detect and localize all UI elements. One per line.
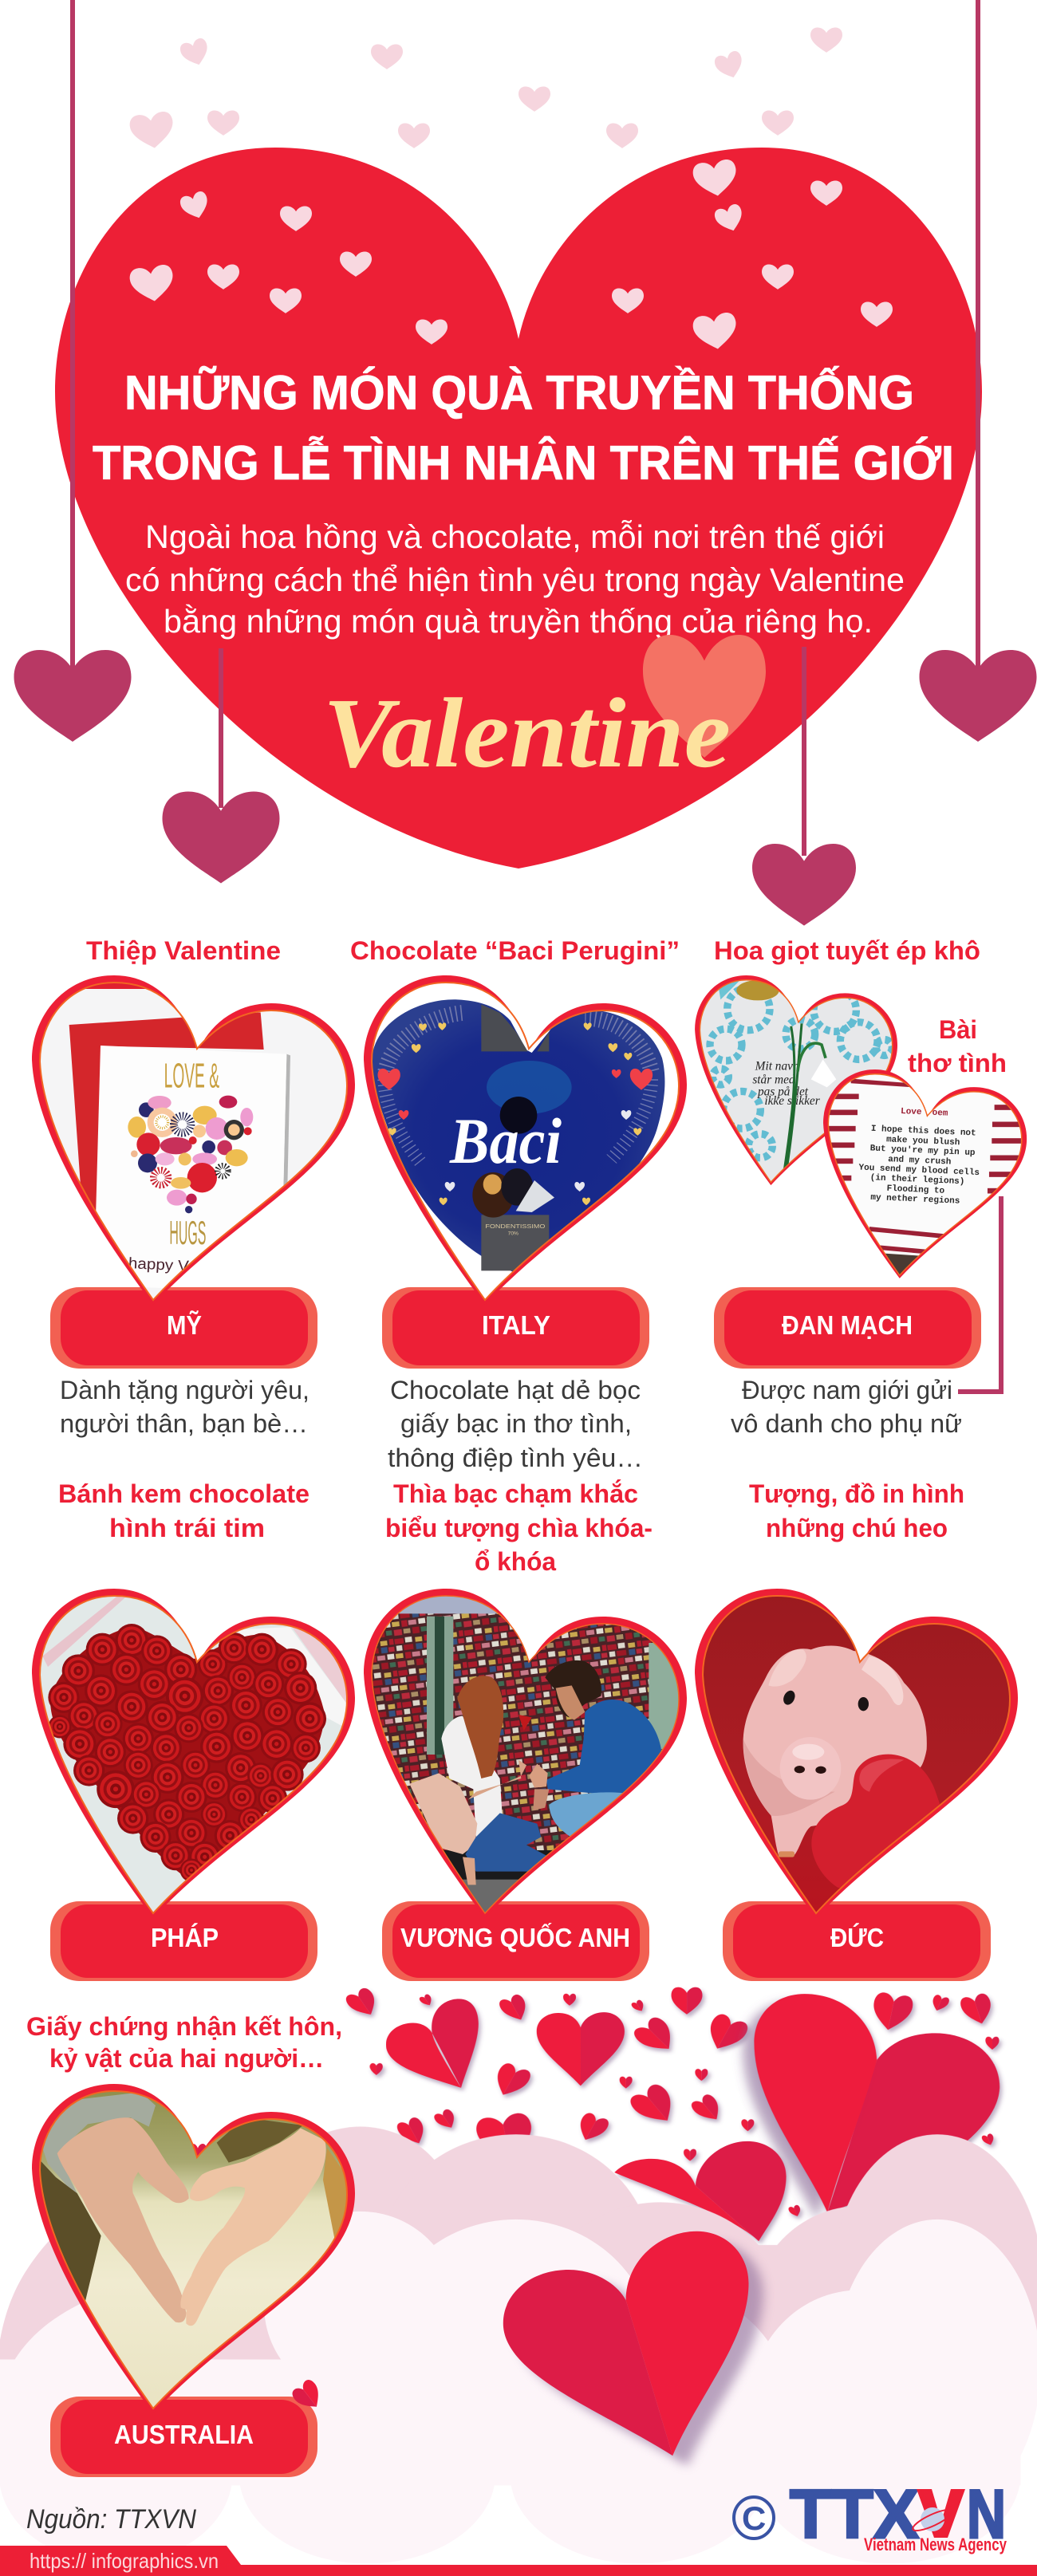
source: Nguồn: TTXVN — [26, 2504, 196, 2535]
row 2 country buttons — [50, 1901, 991, 1981]
row 1 descriptions: Chocolate hạt dẻ bọc — [390, 1376, 641, 1404]
row 2 button text: VƯƠNG QUỐC ANH — [400, 1922, 630, 1952]
row 1 labels: Hoa giọt tuyết ép khô — [714, 936, 980, 965]
label: marriage certificate: kỷ vật của hai người… — [49, 2044, 324, 2073]
row 1 labels: Thiệp Valentine — [86, 936, 281, 965]
photo: love poem heart: make you blush — [886, 1135, 960, 1148]
label: marriage certificate: Giấy chứng nhận kết hôn, — [26, 2012, 342, 2041]
photo: rose heart cake — [32, 1589, 355, 1914]
row 1 descriptions — [60, 1376, 962, 1472]
photo: pressed snowdrop doily heart: pas på det — [757, 1085, 809, 1098]
paper hearts cluster — [343, 1986, 1000, 2241]
photo: pressed snowdrop doily heart: Mit navn — [755, 1060, 799, 1073]
row 1 country buttons — [50, 1287, 981, 1369]
row 1 descriptions: vô danh cho phụ nữ — [731, 1409, 962, 1438]
photo: pressed snowdrop doily heart: står med — [752, 1073, 795, 1086]
row 1 button text: MỸ — [167, 1310, 202, 1340]
row 2 labels — [58, 1479, 964, 1576]
back pink cloud layer — [0, 2127, 1037, 2440]
Australia button text: AUSTRALIA — [114, 2420, 254, 2449]
photo: valentine card: HUGS — [169, 1214, 206, 1251]
photo: valentine card: LOVE & — [164, 1057, 219, 1095]
photo: love poem heart: (in their legions) — [870, 1173, 965, 1187]
photo: love poem heart — [819, 1066, 1031, 1284]
small heart behind Australia photo — [189, 2144, 207, 2165]
logo: TTXVN: N — [967, 2476, 1006, 2553]
Australia button — [50, 2397, 317, 2477]
footer band — [0, 2546, 1037, 2576]
photo: Baci chocolate heart: FONDENTISSIMO — [485, 1223, 546, 1230]
row 2 labels: hình trái tim — [109, 1514, 265, 1542]
photo: love poem heart: You send my blood cells — [858, 1164, 980, 1178]
row 1 descriptions: giấy bạc in thơ tình, — [400, 1409, 632, 1438]
connector line from poem to text — [958, 1196, 1001, 1392]
photo: love poem heart: my nether regions — [870, 1193, 960, 1207]
hanging hearts — [14, 0, 1036, 926]
footer band: https:// infographics.vn — [30, 2549, 219, 2573]
photo: pressed snowdrop doily heart: ikke stikker — [764, 1094, 821, 1108]
label: poem: Bài — [939, 1015, 977, 1044]
photo: couple at padlock bridge — [364, 1589, 687, 1914]
row 2 labels: Tượng, đồ in hình — [749, 1479, 964, 1508]
row 1 descriptions: Dành tặng người yêu, — [60, 1376, 310, 1404]
icon: peach heart behind Valentine — [643, 635, 766, 758]
photo: pressed snowdrop doily heart — [695, 975, 897, 1185]
photo: love poem heart: Flooding to — [886, 1184, 945, 1196]
row 1 descriptions: Được nam giới gửi — [742, 1376, 952, 1404]
front pale cloud layer — [0, 2212, 1037, 2563]
logo: TTXVN — [734, 2476, 1007, 2554]
row 1 labels: Chocolate “Baci Perugini” — [350, 936, 680, 965]
main red heart — [55, 148, 982, 869]
photo: hands forming heart — [24, 2082, 367, 2416]
title: TRONG LỄ TÌNH NHÂN TRÊN THẾ GIỚI — [93, 436, 954, 490]
row 1 button text: ĐAN MẠCH — [782, 1310, 913, 1340]
title: NHỮNG MÓN QUÀ TRUYỀN THỐNG — [124, 366, 914, 419]
row 1 descriptions: thông điệp tình yêu… — [388, 1444, 643, 1472]
intro text: bằng những món quà truyền thống của riêng họ. — [164, 603, 873, 640]
row 1 descriptions: người thân, bạn bè… — [60, 1409, 308, 1438]
pink hearts inside main heart — [128, 158, 893, 352]
intro text: Ngoài hoa hồng và chocolate, mỗi nơi trên thế giới — [145, 518, 885, 555]
photo: Baci chocolate heart: 70% — [508, 1231, 518, 1237]
title — [93, 366, 954, 490]
row 2 labels: biểu tượng chìa khóa- — [385, 1514, 653, 1542]
photo: love poem heart: But you're my pin up — [870, 1144, 976, 1158]
intro text: có những cách thể hiện tình yêu trong ngày Valentine — [125, 561, 905, 598]
logo: TTXVN: TTX — [790, 2476, 919, 2553]
photo: Baci chocolate heart: Baci — [449, 1105, 562, 1177]
row 2 labels: ổ khóa — [475, 1547, 556, 1576]
label: poem — [908, 1015, 1007, 1077]
intro text — [125, 518, 905, 640]
small paper heart on button — [290, 2377, 327, 2415]
row 2 labels: những chú heo — [766, 1514, 948, 1542]
Valentine script word: Valentine — [323, 679, 731, 789]
photo: love poem heart: Love Poem — [901, 1107, 948, 1119]
photo: love poem heart: and my crush — [888, 1155, 952, 1168]
photo: valentine card: happy Valentine — [128, 1255, 246, 1278]
logo: TTXVN: C — [742, 2499, 766, 2537]
row 2 button text — [151, 1922, 884, 1952]
large foreground paper heart — [503, 2231, 763, 2466]
photo: love poem heart: I hope this does not — [871, 1125, 976, 1139]
photo: piggy with heart — [686, 1587, 1029, 1922]
row 2 labels: Bánh kem chocolate — [58, 1479, 310, 1508]
photo: valentine card — [32, 975, 355, 1302]
label: marriage certificate — [26, 2012, 342, 2073]
row 2 labels: Thìa bạc chạm khắc — [393, 1479, 638, 1508]
label: poem: thơ tình — [908, 1049, 1007, 1077]
photo: Baci chocolate heart — [364, 975, 687, 1305]
row 1 button text: ITALY — [482, 1310, 550, 1340]
decorative pink hearts above main heart — [128, 27, 842, 151]
row 2 button text: PHÁP — [151, 1923, 219, 1952]
row 1 button text — [167, 1310, 913, 1340]
row 2 button text: ĐỨC — [830, 1923, 884, 1952]
row 1 labels — [86, 936, 980, 965]
